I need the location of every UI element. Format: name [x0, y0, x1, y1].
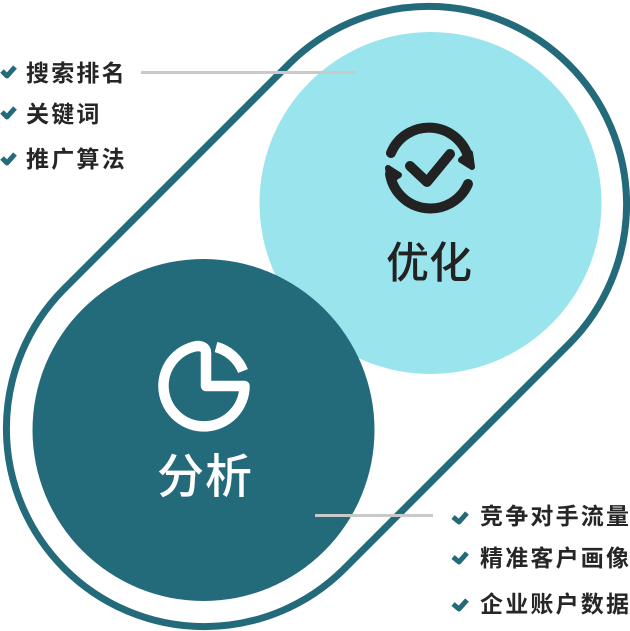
icon: check [2, 67, 15, 76]
item: customer profile: 精准客户画像 [480, 545, 630, 571]
icon: check [453, 600, 467, 609]
circle: optimize [260, 32, 602, 374]
label: optimize: 优化 [386, 240, 472, 288]
icon: check [453, 553, 467, 562]
label: analysis: 分析 [157, 450, 253, 503]
item: search ranking: 搜索排名 [26, 60, 127, 86]
item: account data: 企业账户数据 [480, 591, 630, 617]
item: competitor traffic: 竞争对手流量 [480, 503, 630, 529]
icon: check [2, 108, 15, 117]
list: analysis topics [453, 503, 630, 617]
icon: check cycle [388, 128, 472, 208]
circle: analysis [32, 259, 374, 601]
list: optimize topics [2, 60, 127, 172]
item: promotion algorithm: 推广算法 [26, 146, 127, 172]
icon: check [453, 513, 467, 522]
icon: check [2, 154, 15, 163]
icon: pie chart [164, 346, 244, 426]
leader line: optimize [141, 71, 356, 74]
item: keywords: 关键词 [26, 101, 102, 127]
leader line: analysis [315, 514, 433, 517]
